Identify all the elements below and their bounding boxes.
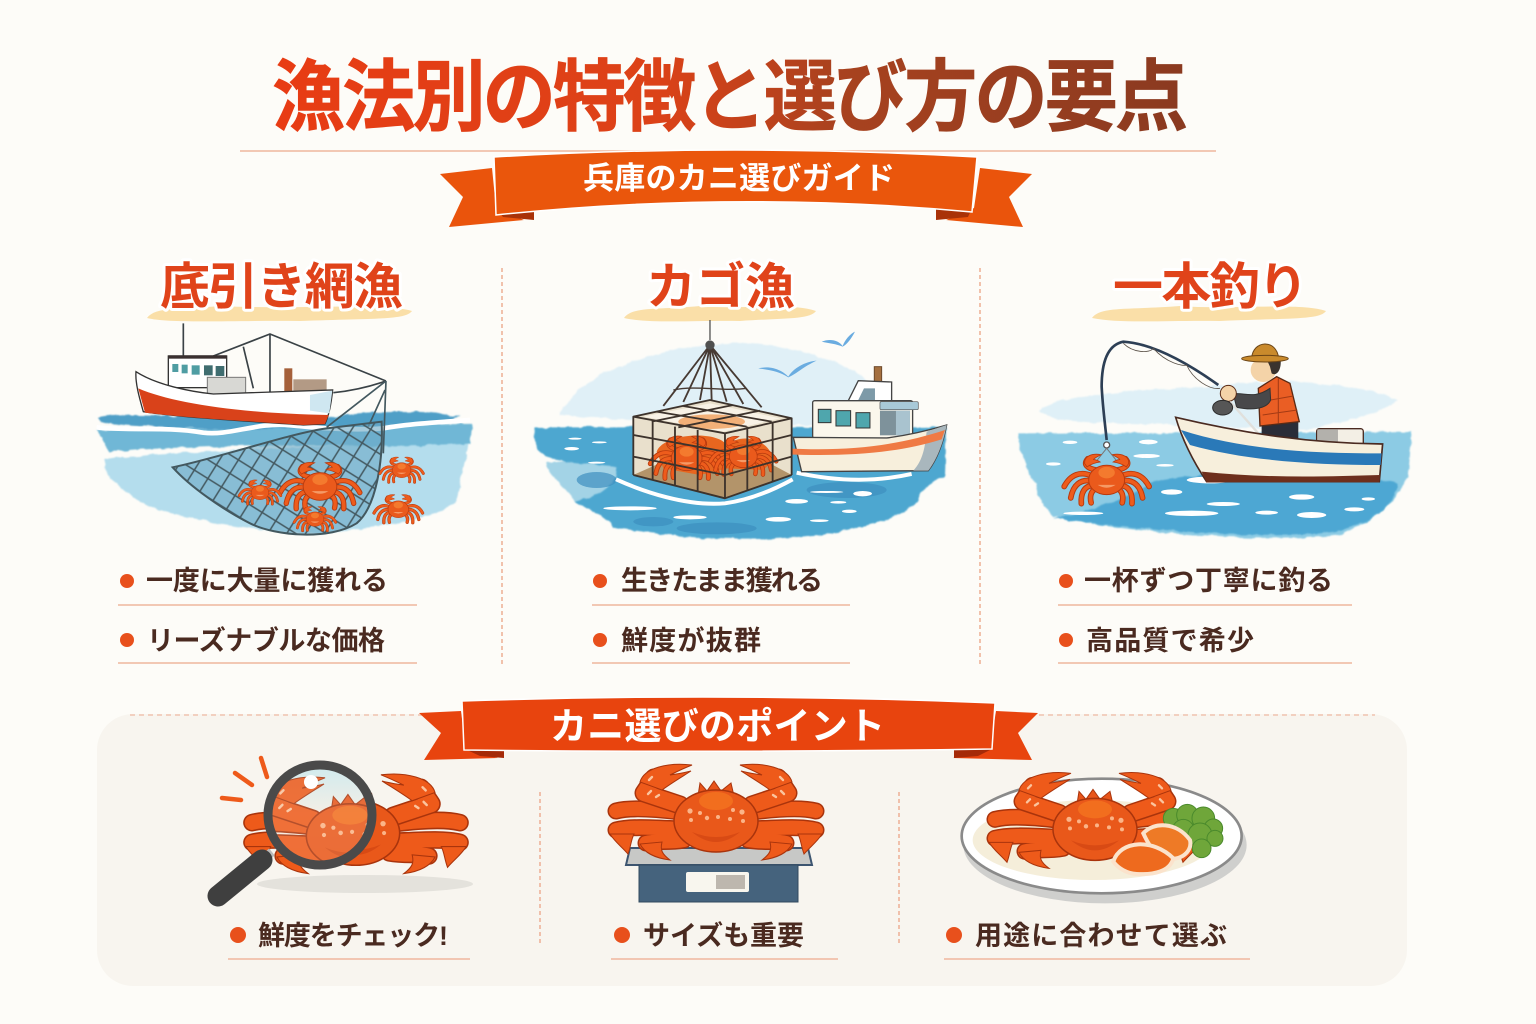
motor	[1317, 429, 1363, 445]
boat	[787, 367, 947, 472]
panel: selection points	[97, 697, 1407, 986]
ribbon: subtitle	[440, 150, 1032, 227]
bullet: purpose	[944, 921, 1250, 959]
bullet: purpose: 用途に合わせて選ぶ	[975, 921, 1227, 951]
illustration: magnifier over crab	[218, 758, 473, 896]
ribbon subtitle text: 兵庫のカニ選びガイド	[583, 161, 895, 196]
bullets: column 1: 一度に大量に獲れる	[146, 566, 388, 596]
bullet: freshness	[228, 921, 470, 959]
heading: pot fishing	[624, 259, 816, 321]
boat	[136, 323, 386, 425]
infographic canvas	[96, 56, 1413, 986]
hooked crab	[1064, 454, 1149, 504]
illustration: angler and crab	[1018, 342, 1412, 538]
heading: pole fishing: 一本釣り	[1113, 259, 1308, 315]
illustration: crab on plate	[962, 773, 1247, 903]
bullet: freshness: 鮮度をチェック!	[258, 921, 448, 951]
crabs in net	[239, 457, 423, 531]
net	[173, 381, 386, 535]
crab pot	[633, 320, 792, 498]
bullets: column 1	[118, 566, 417, 663]
illustration: crab on scale	[610, 764, 822, 902]
bullets: column 2	[592, 566, 850, 663]
bullets: column 2: 生きたまま獲れる	[621, 566, 823, 596]
hull	[1176, 417, 1383, 482]
angler	[1220, 344, 1299, 440]
illustration: crab pot and boat	[535, 320, 947, 539]
title: 漁法別の特徴と選び方の要点	[272, 55, 1188, 142]
bullets: column 3	[1058, 566, 1352, 663]
ribbon: selection points heading	[419, 697, 1038, 760]
bullets: column 1: リーズナブルな価格	[147, 625, 385, 656]
bullets: column 3: 一杯ずつ丁寧に釣る	[1084, 566, 1333, 596]
bullets: column 2: 鮮度が抜群	[621, 625, 761, 656]
illustration: trawl boat and net	[97, 323, 472, 535]
birds	[758, 332, 855, 377]
ribbon heading text: カニ選びのポイント	[550, 706, 885, 747]
garnish	[1113, 804, 1223, 874]
bullets: column 3: 高品質で希少	[1086, 626, 1254, 656]
heading: bottom trawl: 底引き網漁	[160, 259, 403, 315]
fishing rod	[1097, 342, 1258, 460]
bullet: size	[611, 920, 838, 959]
bullet: size: サイズも重要	[643, 920, 804, 951]
heading: pot fishing: カゴ漁	[646, 259, 795, 315]
